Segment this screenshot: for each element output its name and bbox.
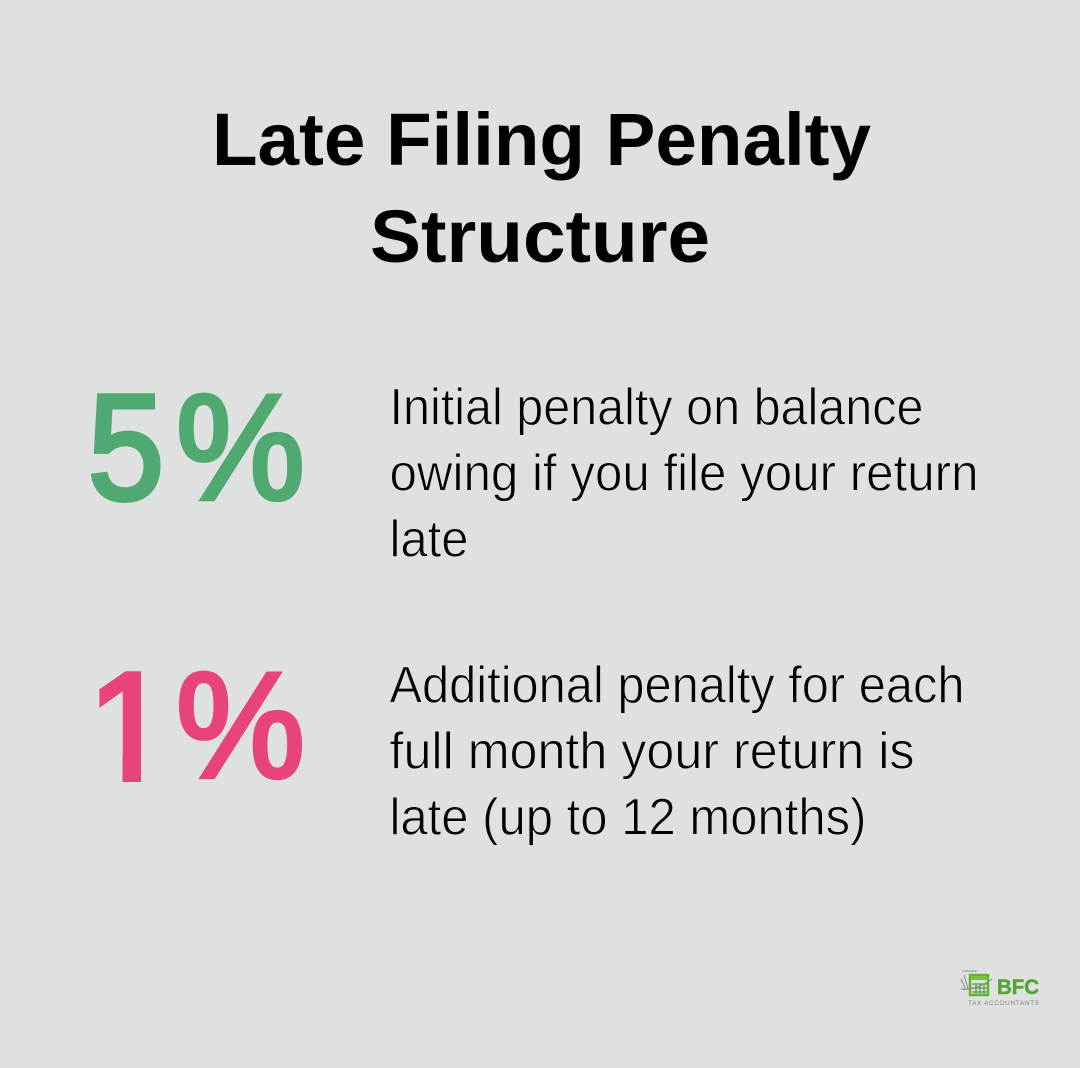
description: 1 percent penalty: Additional penalty for each [390,656,964,714]
title: Late Filing Penalty [212,98,871,181]
description: 5 percent penalty: Initial penalty on balance [390,378,924,436]
stat: 1 percent: % [176,641,305,809]
logo wordmark: BFC [997,976,1039,999]
description: 5 percent penalty: late [390,510,468,568]
logo tagline: TAX ACCOUNTANTS [968,1000,1040,1007]
title [212,98,871,278]
description: 1 percent penalty: full month your return is [390,722,914,780]
infographic canvas [90,111,1039,1005]
description: 1 percent penalty: late (up to 12 months) [390,788,866,846]
stat: 5 percent: % [176,363,305,531]
description: 5 percent penalty [390,378,978,568]
stat: 5 percent: 5 [88,363,164,531]
stat: 1 percent [99,670,302,782]
title: Structure [370,195,710,278]
description: 5 percent penalty: owing if you file your return [390,444,978,502]
icon: calculator with papers [961,971,992,995]
stat: 5 percent [88,363,305,531]
logo: BFC Tax Accountants [961,971,1040,1007]
description: 1 percent penalty [390,656,964,846]
stat: 1 percent: 1 [88,641,171,809]
